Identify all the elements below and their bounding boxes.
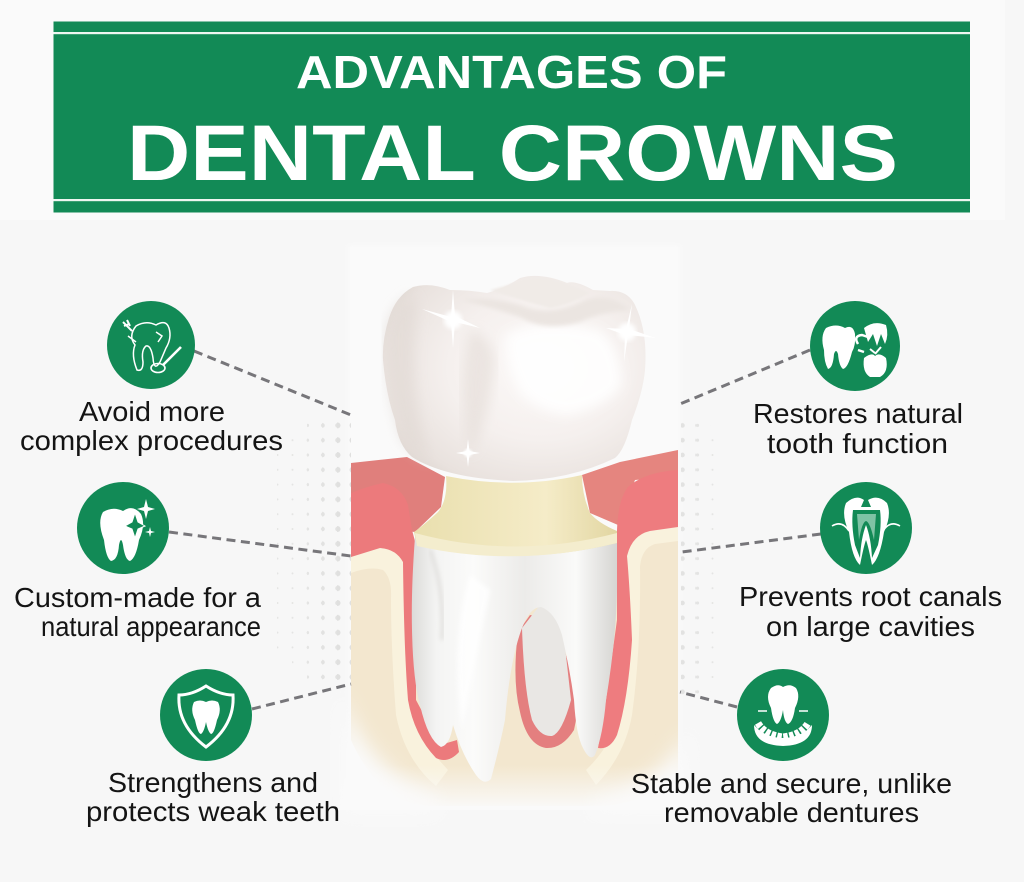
tooth root	[412, 537, 617, 782]
item: restores function	[753, 301, 963, 459]
label: protects weak teeth	[86, 796, 340, 827]
lower fade right	[590, 730, 690, 815]
label: removable dentures	[664, 797, 919, 828]
label	[631, 768, 952, 828]
rear gum pocket	[515, 615, 580, 748]
label	[14, 582, 262, 642]
connector 6	[680, 692, 737, 707]
halftone dots right	[681, 418, 726, 698]
icon: tooth and apple	[810, 301, 900, 391]
root highlight	[458, 575, 490, 730]
lower fade left	[340, 690, 440, 815]
label	[86, 767, 340, 827]
back gum left	[351, 457, 445, 532]
back gum right	[582, 450, 678, 525]
sparkle 2	[606, 304, 656, 362]
cement abutment	[414, 475, 617, 556]
item: strengthens	[86, 669, 340, 827]
front gum left	[351, 483, 459, 760]
item: prevents root canals	[739, 482, 1002, 642]
sparkle 3	[456, 439, 480, 467]
crown left shade	[386, 295, 430, 462]
crown top ridge	[462, 298, 630, 326]
item: custom-made	[14, 482, 262, 642]
label: complex procedures	[20, 425, 283, 456]
crown groove shade	[462, 330, 495, 455]
crown	[383, 276, 646, 481]
crown top surface	[490, 278, 590, 308]
label: on large cavities	[766, 611, 975, 642]
item: stable and secure	[631, 669, 952, 828]
lower fade band	[340, 765, 690, 810]
title line 2: DENTAL CROWNS	[127, 108, 898, 197]
label: natural appearance	[41, 611, 261, 642]
label	[20, 396, 283, 456]
title line 1: ADVANTAGES OF	[296, 46, 727, 98]
connector 3	[252, 684, 351, 709]
connector 5	[682, 534, 821, 552]
dental crown illustration	[340, 276, 690, 815]
label: Restores natural	[753, 398, 963, 429]
bone rim right	[586, 527, 678, 785]
label	[753, 398, 963, 459]
icon: sparkling tooth	[77, 482, 169, 574]
title banner	[54, 22, 970, 212]
root crease	[430, 550, 442, 640]
label	[739, 581, 1002, 642]
jaw bone	[351, 527, 678, 806]
label: Stable and secure, unlike	[631, 768, 952, 799]
label: Strengthens and	[108, 767, 318, 798]
bone rim left	[351, 548, 448, 786]
halftone dots left	[277, 418, 351, 684]
rear root	[522, 605, 571, 736]
front gum right	[598, 470, 678, 748]
icon: broken tooth with tools	[107, 301, 195, 389]
icon: tooth and denture	[737, 669, 829, 761]
center illustration backdrop	[348, 245, 680, 805]
connector 1	[194, 351, 351, 415]
icon: tooth cross-section	[820, 482, 912, 574]
connector 2	[169, 532, 351, 556]
item: avoid more complex procedures	[20, 301, 283, 456]
label: tooth function	[767, 428, 948, 459]
label: Prevents root canals	[739, 581, 1002, 612]
connector 4	[680, 350, 810, 404]
sparkle 1	[422, 290, 480, 348]
label: Custom-made for a	[14, 582, 262, 613]
label: Avoid more	[79, 396, 225, 427]
crown highlight	[505, 324, 622, 415]
icon: shield tooth	[160, 669, 252, 761]
cement rim	[415, 533, 617, 556]
